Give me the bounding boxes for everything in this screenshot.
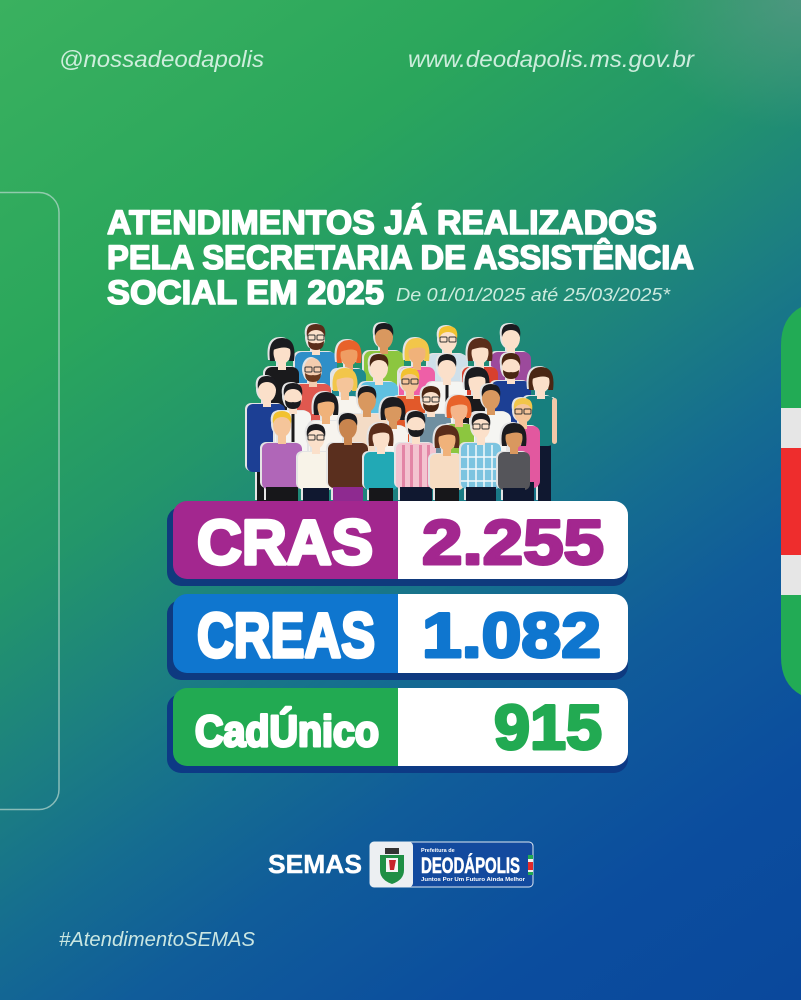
title: PELA SECRETARIA DE ASSISTÊNCIA — [107, 239, 694, 277]
CadUnico row: CadÚnico — [195, 706, 379, 756]
CREAS row: CREAS — [197, 601, 375, 671]
social handle: @nossadeodapolis — [59, 46, 265, 72]
title — [107, 204, 694, 312]
CRAS row — [167, 501, 628, 586]
SEMAS label: SEMAS — [268, 849, 362, 879]
CadUnico row: 915 — [494, 693, 602, 763]
CRAS row: 2.255 — [422, 508, 604, 578]
left outlined panel — [0, 192, 59, 810]
Deodapolis logo: DEODÁPOLIS — [421, 853, 520, 878]
right flag tab — [781, 307, 801, 695]
crowd illustration — [247, 323, 557, 501]
CREAS row: 1.082 — [422, 601, 601, 671]
title: SOCIAL EM 2025 — [107, 274, 384, 312]
website: www.deodapolis.ms.gov.br — [408, 46, 695, 72]
date range: De 01/01/2025 até 25/03/2025* — [396, 285, 671, 305]
title: ATENDIMENTOS JÁ REALIZADOS — [107, 204, 657, 242]
CRAS row: CRAS — [197, 508, 373, 578]
Deodapolis logo: Juntos Por Um Futuro Ainda Melhor — [421, 877, 526, 883]
hashtag: #AtendimentoSEMAS — [59, 929, 256, 951]
CREAS row — [167, 594, 628, 680]
Deodapolis logo — [370, 842, 533, 887]
Deodapolis logo: Prefeitura de — [421, 848, 455, 854]
CadUnico row — [167, 688, 628, 773]
